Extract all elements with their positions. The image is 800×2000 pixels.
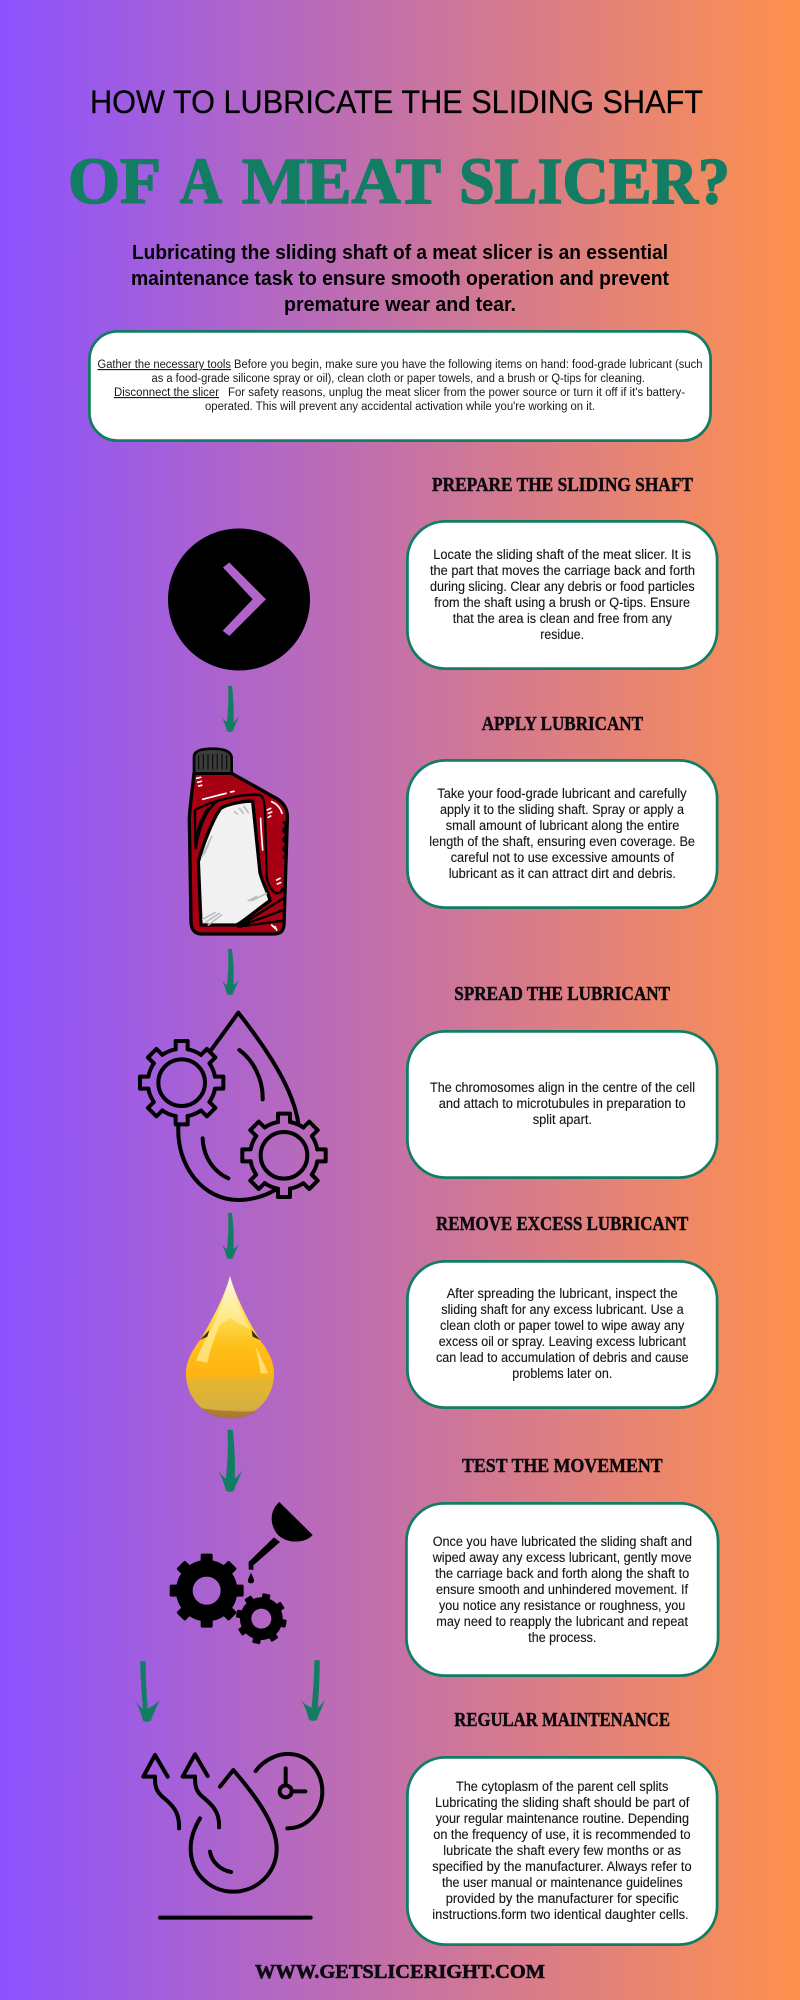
panel: test the movement: wiped away any excess lubricant, gently move	[432, 1550, 692, 1565]
panel: remove excess lubricant: problems later on.	[512, 1366, 612, 1381]
panel: preparation notes	[89, 331, 711, 441]
panel: preparation notes: Disconnect the slicer	[114, 387, 219, 399]
panel: preparation notes: operated. This will prevent any accidental activation while you're working on it.	[205, 401, 595, 413]
icon: oil drop	[186, 1276, 274, 1418]
panel: prepare the sliding shaft: during slicing. Clear any debris or food particles	[430, 579, 695, 594]
panel: prepare the sliding shaft: residue.	[540, 627, 584, 642]
panel: prepare the sliding shaft: that the area is clean and free from any	[453, 611, 672, 626]
panel: apply lubricant	[407, 760, 717, 908]
panel: remove excess lubricant: After spreading the lubricant, inspect the	[447, 1286, 678, 1301]
panel: test the movement	[406, 1503, 718, 1676]
heading: remove excess lubricant: REMOVE EXCESS LUBRICANT	[436, 1213, 689, 1235]
panel: regular maintenance: on the frequency of use, it is recommended to	[433, 1827, 691, 1842]
panel: regular maintenance: Lubricating the sliding shaft should be part of	[435, 1795, 690, 1810]
panel: preparation notes: Gather the necessary tools	[98, 359, 231, 371]
panel: remove excess lubricant: excess oil or spray. Leaving excess lubricant	[439, 1334, 686, 1349]
intro text: Lubricating the sliding shaft of a meat slicer is an essential	[132, 242, 668, 264]
panel: test the movement: Once you have lubricated the sliding shaft and	[433, 1534, 692, 1549]
panel: regular maintenance: The cytoplasm of the parent cell splits	[456, 1779, 669, 1794]
icon: gears and drop	[139, 1013, 327, 1200]
main heading	[68, 145, 730, 218]
panel: prepare the sliding shaft: from the shaft using a brush or Q-tips. Ensure	[434, 595, 690, 610]
arrow: right fork	[301, 1660, 325, 1721]
intro text: premature wear and tear.	[284, 294, 516, 316]
panel: regular maintenance: your regular maintenance routine. Depending	[436, 1811, 689, 1826]
panel: test the movement: the process.	[528, 1630, 596, 1645]
panel: remove excess lubricant: sliding shaft for any excess lubricant. Use a	[441, 1302, 684, 1317]
arrow: step 3 to 4	[221, 1213, 239, 1259]
panel: apply lubricant: Take your food-grade lubricant and carefully	[437, 786, 687, 801]
panel: prepare the sliding shaft: the part that moves the carriage back and forth	[430, 563, 695, 578]
panel: apply lubricant: length of the shaft, ensuring even coverage. Be	[429, 834, 695, 849]
panel: regular maintenance: lubricate the shaft every few months or as	[443, 1843, 681, 1858]
panel: spread the lubricant	[407, 1031, 717, 1178]
heading: apply lubricant: APPLY LUBRICANT	[482, 713, 644, 735]
panel: preparation notes: Before you begin, make sure you have the following items on hand: food-grade lubricant (such	[234, 359, 702, 371]
main heading: A	[180, 145, 222, 218]
panel: test the movement: ensure smooth and unhindered movement. If	[436, 1582, 688, 1597]
panel: regular maintenance: provided by the manufacturer for specific	[446, 1891, 679, 1906]
intro text	[131, 242, 669, 316]
panel: prepare the sliding shaft	[407, 521, 717, 669]
arrow: step 4 to 5	[218, 1430, 242, 1492]
heading: test the movement: TEST THE MOVEMENT	[462, 1455, 663, 1477]
panel: remove excess lubricant	[407, 1261, 717, 1408]
panel: remove excess lubricant: clean cloth or paper towel to wipe away any	[440, 1318, 685, 1333]
icon: chevron circle	[168, 528, 310, 670]
arrow: step 1 to 2	[221, 686, 239, 732]
footer url: WWW.GETSLICERIGHT.COM	[255, 1961, 545, 1983]
icon: oil bottle	[189, 749, 287, 934]
arrow: left fork	[135, 1661, 159, 1722]
panel: prepare the sliding shaft: Locate the sliding shaft of the meat slicer. It is	[433, 547, 691, 562]
panel: spread the lubricant: split apart.	[533, 1112, 592, 1127]
panel: remove excess lubricant: can lead to accumulation of debris and cause	[436, 1350, 689, 1365]
intro text: maintenance task to ensure smooth operation and prevent	[131, 268, 669, 290]
panel: regular maintenance: instructions.form two identical daughter cells.	[432, 1907, 689, 1922]
arrow: step 2 to 3	[221, 949, 239, 995]
main heading: MEAT	[242, 145, 441, 218]
panel: test the movement: may need to reapply the lubricant and repeat	[436, 1614, 688, 1629]
panel: regular maintenance	[407, 1757, 717, 1945]
panel: apply lubricant: lubricant as it can attract dirt and debris.	[449, 866, 676, 881]
icon: gears with oil funnel	[170, 1502, 313, 1649]
panel: test the movement: you notice any resistance or roughness, you	[439, 1598, 685, 1613]
heading: regular maintenance: REGULAR MAINTENANCE	[454, 1709, 670, 1731]
panel: spread the lubricant: The chromosomes align in the centre of the cell	[430, 1080, 695, 1095]
panel: preparation notes: as a food-grade silicone spray or oil), clean cloth or paper towels, and a brush or Q-tips for cleaning.	[152, 373, 645, 385]
panel: apply lubricant: apply it to the sliding shaft. Spray or apply a	[440, 802, 684, 817]
panel: regular maintenance: the user manual or maintenance guidelines	[442, 1875, 683, 1890]
panel: preparation notes: For safety reasons, unplug the meat slicer from the power source or turn it off if it's battery-	[228, 387, 685, 399]
panel: test the movement: the carriage back and forth along the shaft to	[435, 1566, 689, 1581]
title: HOW TO LUBRICATE THE SLIDING SHAFT	[90, 84, 703, 120]
heading: spread the lubricant: SPREAD THE LUBRICANT	[454, 983, 671, 1005]
panel: apply lubricant: small amount of lubricant along the entire	[446, 818, 679, 833]
panel: spread the lubricant: and attach to microtubules in preparation to	[439, 1096, 686, 1111]
main heading: OF	[68, 145, 161, 218]
panel: apply lubricant: careful not to use excessive amounts of	[451, 850, 674, 865]
heading: prepare the sliding shaft: PREPARE THE SLIDING SHAFT	[432, 474, 694, 496]
main heading: SLICER?	[459, 145, 730, 218]
panel: regular maintenance: specified by the manufacturer. Always refer to	[432, 1859, 692, 1874]
icon: maintenance drop, arrows and clock	[143, 1754, 322, 1918]
